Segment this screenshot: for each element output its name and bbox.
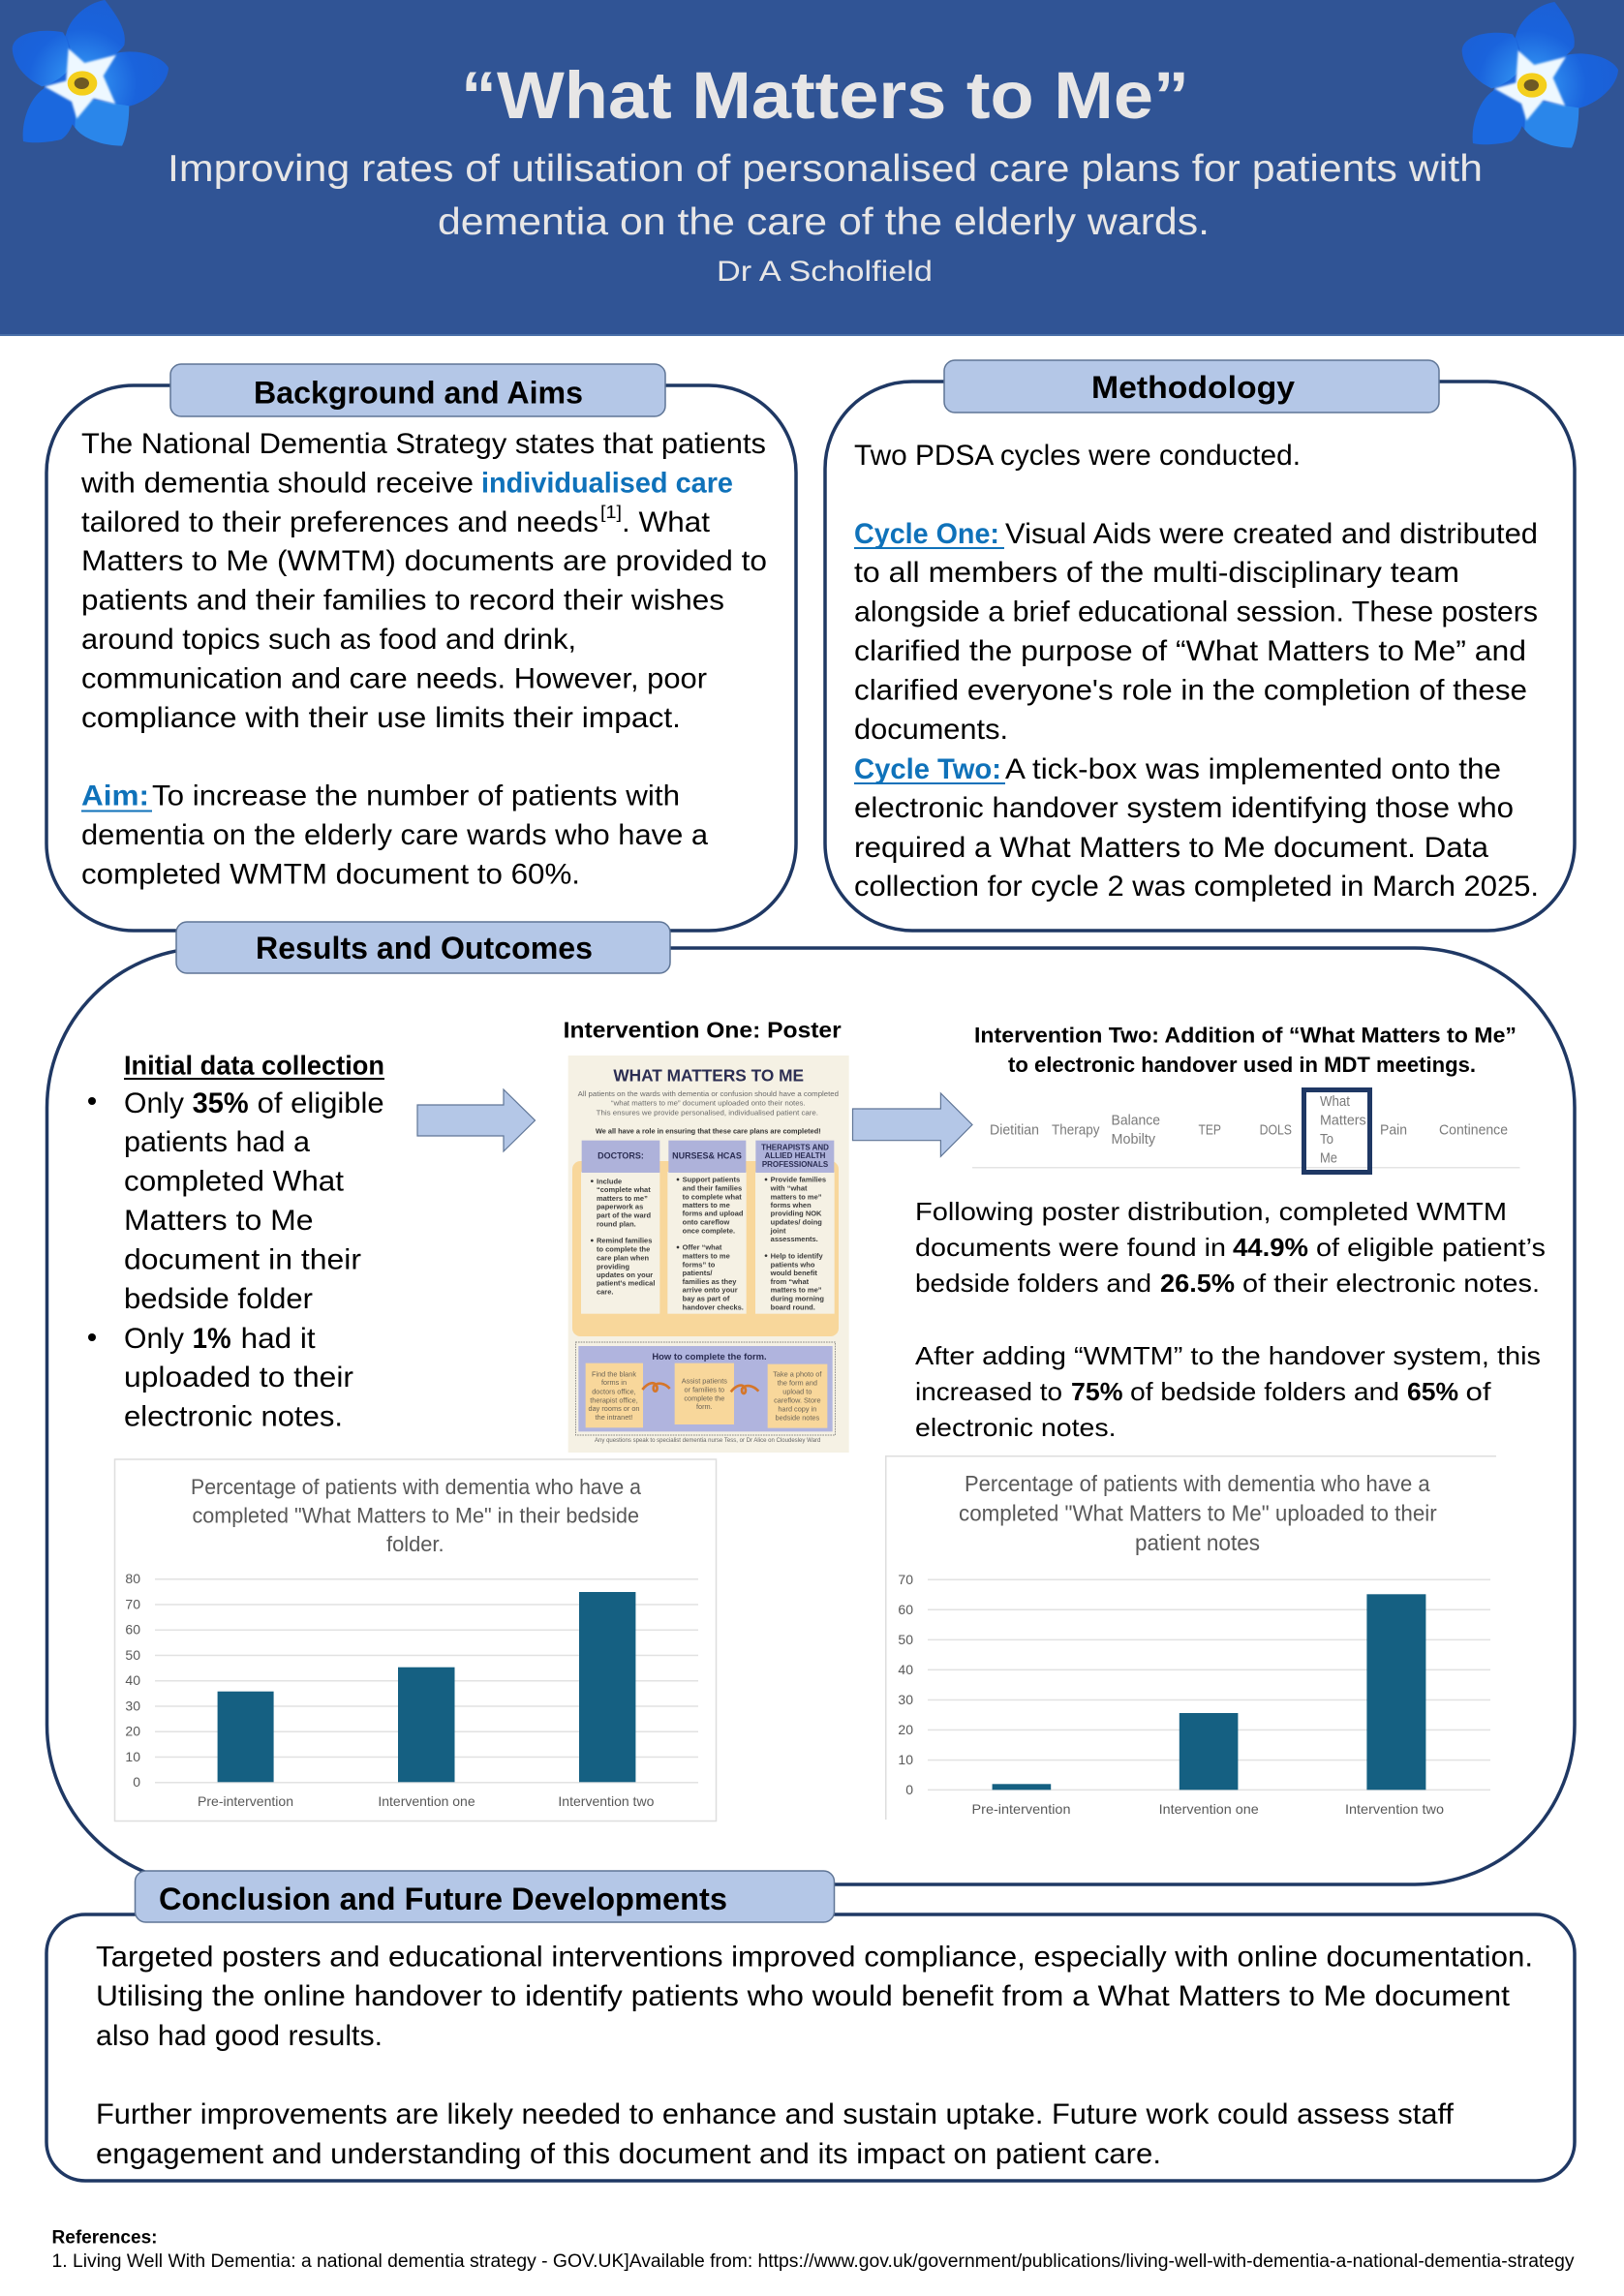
poster column: doctors: providing (597, 1262, 630, 1270)
poster title: WHAT MATTERS TO ME (613, 1066, 804, 1086)
text: background: individualised care (481, 467, 733, 499)
poster column: therapists: matters to me” (771, 1192, 822, 1201)
poster column: nurses: once complete. (683, 1226, 735, 1235)
poster how-to box: forms in (601, 1378, 627, 1387)
poster intro: This ensures we provide personalised, individualised patient care. (597, 1110, 818, 1117)
poster how-to box: the form and (778, 1379, 817, 1388)
text: intervention findings: electronic notes. (915, 1413, 1116, 1442)
handover screenshot: Me (1320, 1150, 1337, 1167)
icon: forget-me-not flower left (13, 0, 169, 146)
poster column: doctors: care plan when (597, 1253, 649, 1262)
text: cycle two: A tick-box was implemented onto the (1005, 753, 1501, 785)
x axis: Intervention two (1345, 1801, 1444, 1817)
x axis: Intervention one (378, 1793, 475, 1809)
x axis (198, 1793, 655, 1809)
chart: bedside folder (114, 1459, 717, 1821)
poster how-to box: complete the (684, 1393, 724, 1402)
panel: methodology (825, 360, 1575, 931)
x axis: Pre-intervention (198, 1793, 293, 1809)
icon: forget-me-not flower right (1462, 2, 1618, 148)
y axis: 30 (898, 1692, 913, 1707)
text: cycle two: electronic handover system identifying those who (854, 792, 1514, 824)
y axis: 50 (898, 1632, 913, 1647)
text: cycle one (854, 518, 1538, 746)
text: intervention findings: of (1466, 1377, 1491, 1406)
references: References: (52, 2228, 157, 2249)
poster column: nurses: and their families (683, 1183, 742, 1192)
handover screenshot: Continence (1439, 1122, 1508, 1139)
text: conclusion: Utilising the online handover to identify patients who would benefit from a What Matters to Me document (96, 1980, 1511, 2012)
poster column: nurses: matters to me (683, 1201, 730, 1209)
poster column: therapists: assessments. (771, 1235, 818, 1243)
title: “What Matters to Me” (461, 58, 1189, 133)
bars (218, 1592, 635, 1782)
chart title: completed "What Matters to Me" in their bedside (192, 1504, 639, 1528)
arrow: to handover (852, 1093, 972, 1156)
y axis: 50 (125, 1647, 140, 1663)
poster column: nurses: forms and upload (683, 1209, 744, 1218)
poster how-to box: or families to (685, 1385, 724, 1393)
poster column headers: THERAPISTS AND (761, 1143, 829, 1151)
poster how-to box: Find the blank (592, 1369, 636, 1378)
chart title (959, 1471, 1437, 1555)
text: background: patients and their families to record their wishes (81, 585, 724, 617)
text: cycle two (854, 753, 1539, 903)
poster column: therapists: joint (770, 1226, 786, 1235)
text: background: tailored to their preferences and needs (81, 506, 598, 538)
poster column headers: ALLIED HEALTH (765, 1151, 826, 1160)
text: initial data collection: bedside folder (124, 1283, 313, 1315)
handover screenshot: What (1320, 1093, 1351, 1110)
poster column headers: PROFESSIONALS (762, 1160, 829, 1169)
references: 1. Living Well With Dementia: a national dementia strategy - GOV.UK]Available from: https://www.gov.uk/government/publications/living-well-with-dementia-a-national-dementia-strategy (52, 2251, 1575, 2272)
poster intro (578, 1091, 839, 1135)
poster how-to box (575, 1342, 836, 1435)
text: cycle two: Cycle Two: (854, 753, 1001, 785)
poster column: therapists: Provide families (771, 1176, 826, 1184)
handover screenshot: Matters (1320, 1113, 1366, 1129)
heading: methodology (944, 360, 1439, 413)
text: background: . What (622, 506, 711, 538)
y axis: 70 (125, 1596, 140, 1611)
poster column: therapists: providing NOK (771, 1209, 822, 1218)
heading: intervention two (974, 1024, 1517, 1077)
text: aim (81, 781, 708, 890)
x axis: Intervention one (1159, 1801, 1259, 1817)
text: initial data collection: 1% (193, 1323, 231, 1355)
y axis (898, 1572, 913, 1797)
heading: background and aims: Background and Aims (254, 376, 583, 411)
poster column: nurses: Support patients (683, 1176, 740, 1184)
text: conclusion (96, 1942, 1533, 2170)
text: intervention findings: After adding “WMTM” to the handover system, this (915, 1341, 1541, 1370)
y axis: 30 (125, 1699, 140, 1714)
poster how-to box: day rooms or on (589, 1404, 639, 1413)
text: cycle one: to all members of the multi-disciplinary team (854, 557, 1459, 589)
y axis: 70 (898, 1572, 913, 1587)
poster how-to box: Assist patients (682, 1376, 727, 1385)
poster column: nurses: arrive onto your (683, 1286, 738, 1295)
text: background: [1] (600, 503, 622, 522)
subtitle (168, 148, 1483, 243)
y axis: 40 (125, 1672, 140, 1688)
chart title: Percentage of patients with dementia who have a (965, 1471, 1430, 1496)
panel: conclusion (46, 1871, 1575, 2181)
poster column: nurses: onto careflow (683, 1218, 729, 1227)
poster column: therapists: updates/ doing (771, 1218, 822, 1227)
y axis: 10 (898, 1752, 913, 1767)
text: cycle one: clarified the purpose of “What Matters to Me” and (854, 635, 1526, 667)
y axis: 0 (133, 1774, 140, 1790)
poster how-to box: form. (696, 1402, 713, 1411)
poster how-to box: hard copy in (778, 1405, 816, 1414)
poster column: therapists: during morning (771, 1295, 824, 1303)
poster column: therapists: patients who (771, 1260, 815, 1269)
text: cycle one: Visual Aids were created and distributed (1005, 518, 1538, 550)
poster column: nurses: Offer “what (683, 1243, 722, 1252)
heading: results and outcomes (176, 922, 670, 973)
poster column: doctors: Remind families (597, 1237, 652, 1245)
chart: patient notes (885, 1455, 1496, 1820)
poster column: therapists: from “what (771, 1277, 810, 1286)
poster column: therapists: with “what (770, 1183, 808, 1192)
chart title: folder. (386, 1532, 444, 1556)
text: background: with dementia should receive (80, 467, 474, 499)
handover screenshot: To (1320, 1131, 1333, 1148)
text: background (80, 428, 767, 734)
text: intervention findings: 75% (1071, 1377, 1123, 1406)
y axis: 20 (898, 1722, 913, 1737)
poster column: therapists: forms when (771, 1201, 812, 1209)
text: initial data collection: electronic notes. (124, 1400, 343, 1433)
poster column: doctors: updates on your (597, 1270, 653, 1279)
text: initial data collection: 35% (193, 1087, 249, 1119)
poster column: nurses: matters to me (683, 1252, 730, 1261)
y axis: 40 (898, 1662, 913, 1677)
poster column: doctors: care. (597, 1288, 613, 1297)
text: cycle one: Cycle One: (854, 518, 999, 550)
text: conclusion: engagement and understanding of this document and its impact on patient care. (96, 2138, 1161, 2170)
panel: background and aims (46, 364, 796, 931)
poster column: doctors: patient's medical (597, 1279, 655, 1288)
panel: results and outcomes (46, 922, 1575, 1884)
handover screenshot: Mobilty (1112, 1131, 1155, 1148)
chart title: completed "What Matters to Me" uploaded to their (959, 1501, 1437, 1526)
poster how-to box: therapist office, (590, 1395, 638, 1404)
poster column: nurses: handover checks. (683, 1302, 744, 1311)
text: aim: To increase the number of patients with (152, 781, 680, 812)
subtitle: Improving rates of utilisation of personalised care plans for patients with (168, 148, 1483, 190)
poster column: nurses (677, 1176, 744, 1311)
poster how-to box: careflow. Store (774, 1396, 821, 1405)
chart title (191, 1475, 642, 1556)
x axis: Intervention two (558, 1793, 655, 1809)
poster column: nurses: bay as part of (683, 1295, 730, 1303)
text: cycle one: alongside a brief educational session. These posters (854, 597, 1538, 628)
poster column: nurses: families as they (683, 1277, 737, 1286)
poster column: doctors: “complete what (597, 1185, 651, 1194)
poster intro: We all have a role in ensuring that these care plans are completed! (596, 1128, 821, 1135)
text: intervention findings: 44.9% (1233, 1233, 1308, 1262)
handover screenshot: Pain (1380, 1122, 1407, 1139)
chart title: patient notes (1135, 1530, 1260, 1555)
poster how-to box: upload to (782, 1388, 812, 1396)
poster how-to box: bedside notes (776, 1414, 819, 1423)
handover screenshot: Dietitian (990, 1122, 1039, 1139)
poster column: doctors (591, 1177, 655, 1297)
heading: conclusion (136, 1871, 835, 1922)
poster column: therapists: matters to me” (771, 1286, 822, 1295)
poster how-to box: the intranet! (596, 1413, 632, 1422)
poster column: nurses: forms” to (683, 1260, 716, 1269)
text: intervention findings: of bedside folders and (1130, 1377, 1399, 1406)
handover screenshot: TEP (1199, 1122, 1221, 1139)
text: intervention findings (915, 1197, 1546, 1442)
text: cycle two: required a What Matters to Me document. Data (854, 832, 1488, 864)
text: aim: completed WMTM document to 60%. (81, 858, 580, 890)
heading: results and outcomes: Results and Outcomes (256, 931, 593, 965)
text: background: around topics such as food and drink, (81, 624, 576, 656)
poster how-to box: How to complete the form. (652, 1352, 767, 1362)
poster how-to box: doctors office, (592, 1387, 636, 1395)
text: intervention findings: bedside folders and (915, 1269, 1151, 1298)
x axis: Pre-intervention (972, 1801, 1071, 1817)
text: initial data collection: of eligible (258, 1087, 384, 1119)
y axis: 60 (898, 1602, 913, 1617)
poster column: therapists: would benefit (770, 1269, 817, 1277)
poster column: doctors: to complete the (597, 1245, 650, 1254)
poster column headers: NURSES& HCAS (672, 1150, 742, 1160)
text: initial data collection: Matters to Me (124, 1205, 314, 1237)
subtitle: dementia on the care of the elderly wards. (438, 201, 1210, 243)
y axis: 10 (125, 1749, 140, 1764)
bars (993, 1594, 1425, 1790)
references (52, 2228, 1575, 2272)
poster column: doctors: round plan. (597, 1219, 636, 1228)
heading: intervention two: Intervention Two: Addition of “What Matters to Me” (974, 1024, 1517, 1048)
text: cycle one: documents. (854, 714, 1008, 746)
text: aim: Aim: (81, 781, 149, 812)
poster column: therapists: Help to identify (771, 1251, 824, 1260)
poster intro: “what matters to me” document uploaded onto their notes. (611, 1101, 806, 1108)
text: initial data collection: document in their (124, 1244, 361, 1276)
poster image (568, 1056, 849, 1453)
text: background: communication and care needs. However, poor (81, 662, 707, 694)
poster column: doctors: matters to me” (597, 1194, 648, 1203)
heading: intervention one: Intervention One: Poster (564, 1018, 842, 1043)
poster how-to box: Take a photo of (773, 1370, 822, 1379)
text: cycle one: clarified everyone's role in the completion of these (854, 675, 1527, 707)
heading: background and aims (170, 364, 665, 416)
handover screenshot: Therapy (1052, 1122, 1100, 1139)
y axis: 0 (905, 1782, 913, 1797)
text: initial data collection: Only (124, 1323, 184, 1355)
poster column: nurses: patients/ (683, 1269, 712, 1277)
poster column: therapists: board round. (771, 1302, 815, 1311)
text: intervention findings: of their electronic notes. (1242, 1269, 1540, 1298)
text: intro: Two PDSA cycles were conducted. (854, 440, 1301, 472)
poster column: doctors: Include (597, 1177, 622, 1185)
header banner (0, 0, 1624, 336)
x axis (972, 1801, 1444, 1817)
text: aim: dementia on the elderly care wards who have a (81, 819, 708, 851)
handover screenshot: Balance (1112, 1113, 1160, 1129)
poster footer: Any questions speak to specialist dementia nurse Tess, or Dr Alice on Cloudesley Ward (595, 1438, 820, 1444)
text: intervention findings: Following poster distribution, completed WMTM (915, 1197, 1507, 1226)
arrow: to poster (417, 1089, 535, 1151)
text: background: The National Dementia Strategy states that patients (81, 428, 766, 460)
text: initial data collection (88, 1051, 384, 1433)
text: background: compliance with their use limits their impact. (81, 702, 681, 734)
y axis: 80 (125, 1571, 140, 1586)
text: conclusion: Further improvements are likely needed to enhance and sustain uptake. Future work could assess staff (96, 2098, 1455, 2130)
text: intervention findings: 26.5% (1160, 1269, 1235, 1298)
text: initial data collection: patients had a (124, 1126, 310, 1158)
text: intervention findings: 65% (1407, 1377, 1458, 1406)
text: intervention findings: documents were found in (915, 1233, 1226, 1262)
poster column: nurses: to complete what (683, 1192, 742, 1201)
chart title: Percentage of patients with dementia who have a (191, 1475, 642, 1499)
text: initial data collection: completed What (124, 1166, 345, 1198)
text: conclusion: also had good results. (96, 2020, 383, 2052)
handover screenshot (972, 1090, 1520, 1172)
poster column: therapists (765, 1176, 826, 1311)
text: background: Matters to Me (WMTM) documents are provided to (81, 545, 767, 577)
text: initial data collection: Initial data collection (124, 1051, 384, 1081)
text: intervention findings: increased to (915, 1377, 1062, 1406)
y axis: 60 (125, 1622, 140, 1638)
poster column: doctors: paperwork as (597, 1203, 643, 1211)
poster column headers (582, 1141, 834, 1173)
y axis (125, 1571, 140, 1790)
text: cycle two: collection for cycle 2 was completed in March 2025. (854, 871, 1539, 903)
text: initial data collection: had it (241, 1323, 316, 1355)
heading: methodology: Methodology (1091, 370, 1295, 405)
text: conclusion: Targeted posters and educational interventions improved compliance, especially with online documentation. (96, 1942, 1533, 1974)
author: Dr A Scholfield (717, 256, 933, 288)
heading: conclusion: Conclusion and Future Developments (159, 1882, 727, 1916)
y axis: 20 (125, 1724, 140, 1739)
text: initial data collection: uploaded to their (124, 1362, 353, 1393)
poster column headers: DOCTORS: (598, 1150, 644, 1160)
poster column: doctors: part of the ward (597, 1211, 652, 1220)
text: initial data collection: Only (124, 1087, 184, 1119)
handover screenshot: DOLS (1260, 1122, 1292, 1139)
text: intervention findings: of eligible patient’s (1316, 1233, 1546, 1262)
heading: intervention two: to electronic handover used in MDT meetings. (1008, 1053, 1476, 1077)
poster intro: All patients on the wards with dementia or confusion should have a completed (578, 1091, 839, 1098)
